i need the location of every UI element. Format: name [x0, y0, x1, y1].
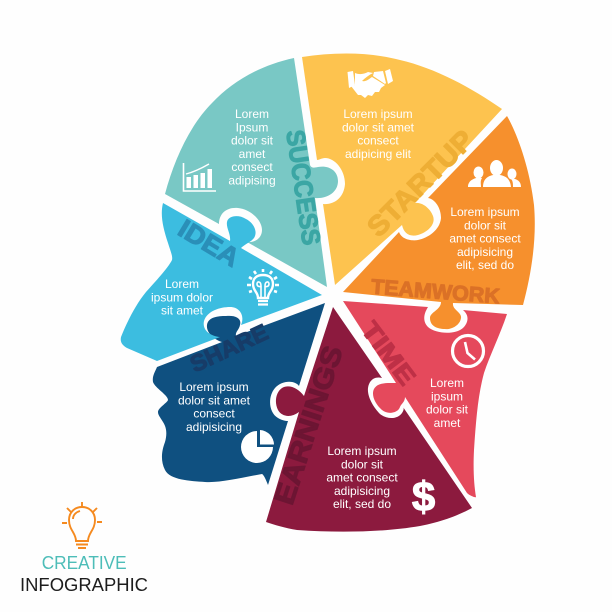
teamwork text: adipisicing [457, 245, 513, 259]
earnings puzzle piece [266, 307, 472, 532]
panel: earnings [266, 307, 472, 532]
earnings text: amet consect [326, 471, 398, 485]
startup text: Lorem ipsum [343, 107, 413, 121]
icon: handshake [348, 69, 393, 98]
time text: Lorem [430, 376, 464, 390]
startup text: consect [357, 134, 399, 148]
icon: orange light bulb [62, 502, 102, 548]
icon: clock [452, 336, 484, 366]
icon: growth chart [184, 163, 216, 191]
success text: Ipsum [236, 120, 268, 134]
logo word: creative: CREATIVE [42, 553, 127, 573]
share puzzle piece [153, 303, 325, 485]
idea text: ipsum dolor [151, 290, 213, 304]
panel: success [165, 58, 338, 287]
panel: idea [121, 203, 322, 361]
teamwork text: elit, sed do [456, 258, 514, 272]
time text: dolor sit [426, 403, 469, 417]
startup text: adipicing elit [345, 147, 412, 161]
success text: dolor sit [231, 134, 274, 148]
success puzzle piece [165, 58, 338, 287]
teamwork heading: TEAMWORK [370, 276, 501, 308]
share text: Lorem ipsum [179, 380, 249, 394]
icon: people [468, 160, 521, 187]
logo: creative infographic [20, 502, 148, 595]
icon: light bulb [247, 269, 279, 304]
icon: pie chart [241, 430, 274, 463]
success text: adipising [228, 174, 276, 188]
icon: dollar: $ [412, 473, 435, 520]
earnings text: adipisicing [334, 484, 390, 498]
panel: teamwork [343, 116, 535, 329]
share text: adipisicing [186, 420, 242, 434]
time text: amet [434, 416, 461, 430]
earnings text: dolor sit [341, 457, 384, 471]
share heading: SHARE [186, 319, 272, 377]
idea puzzle piece [121, 203, 322, 361]
time heading: TIME [355, 316, 421, 391]
teamwork text: dolor sit [464, 218, 507, 232]
panel: share [153, 303, 325, 485]
success text: Lorem [235, 107, 269, 121]
time puzzle piece [343, 301, 507, 497]
logo word: infographic: INFOGRAPHIC [20, 574, 148, 595]
teamwork text: amet consect [449, 232, 521, 246]
earnings text: Lorem ipsum [327, 444, 397, 458]
time text: ipsum [431, 389, 463, 403]
share text: dolor sit amet [178, 393, 251, 407]
panel: startup [302, 54, 502, 285]
idea text: sit amet [161, 304, 204, 318]
teamwork puzzle piece [343, 116, 535, 329]
teamwork text: Lorem ipsum [450, 205, 520, 219]
success heading: SUCCESS [280, 128, 327, 247]
startup puzzle piece [302, 54, 502, 285]
idea text: Lorem [165, 277, 199, 291]
startup text: dolor sit amet [342, 120, 415, 134]
earnings text: elit, sed do [333, 497, 391, 511]
panel: time [343, 301, 507, 497]
idea heading: IDEA [173, 213, 245, 273]
success text: consect [231, 160, 273, 174]
share text: consect [193, 407, 235, 421]
startup heading: STARTUP [361, 124, 480, 243]
success text: amet [239, 147, 266, 161]
earnings heading: EARNINGS [268, 342, 349, 508]
